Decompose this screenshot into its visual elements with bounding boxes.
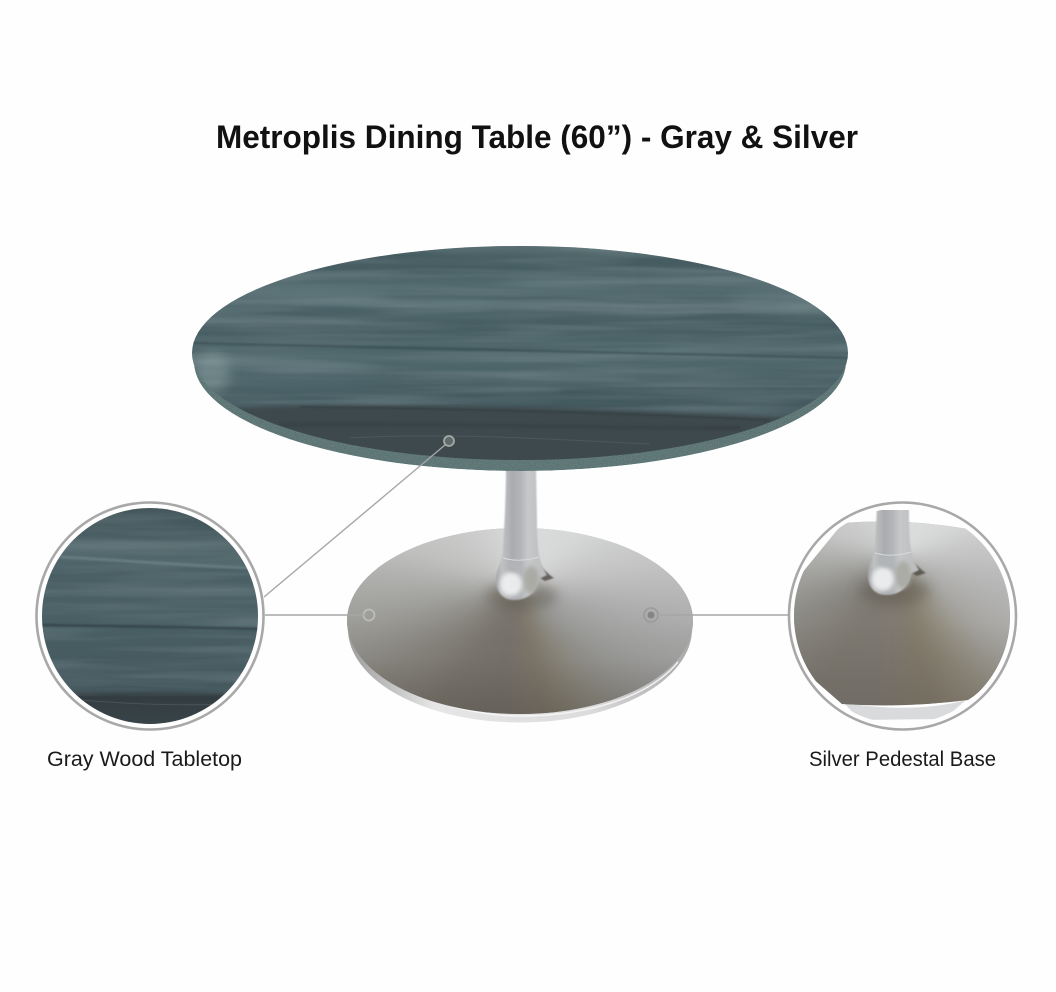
line: base to left circle bbox=[265, 614, 364, 616]
pedestal stem bbox=[486, 468, 558, 610]
label: gray wood tabletop: Gray Wood Tabletop bbox=[47, 748, 242, 771]
line: tabletop to left circle bbox=[264, 445, 445, 597]
callout dot: left base bbox=[364, 610, 374, 620]
base surface bbox=[347, 528, 693, 714]
base rim zoom bbox=[843, 700, 966, 720]
detail circle: gray wood tabletop bbox=[36, 502, 264, 730]
detail circle: silver pedestal base bbox=[788, 501, 1018, 731]
line: base to right circle bbox=[658, 614, 788, 616]
label: silver pedestal base: Silver Pedestal Base bbox=[809, 748, 996, 771]
title: Metroplis Dining Table (60”) - Gray & Silver bbox=[216, 119, 858, 155]
stem zoom bbox=[858, 510, 932, 606]
tabletop surface bbox=[190, 244, 850, 470]
wood texture bbox=[40, 506, 260, 726]
base rim bbox=[348, 536, 692, 722]
callout dot: right base bbox=[644, 608, 658, 622]
tabletop bbox=[190, 244, 850, 475]
ring bbox=[789, 502, 1016, 730]
base surface zoom bbox=[790, 515, 1014, 710]
wood grain bbox=[192, 248, 816, 416]
pedestal base bbox=[347, 468, 693, 722]
tabletop edge bbox=[194, 365, 846, 471]
callout lines bbox=[264, 445, 788, 615]
metal zoom bbox=[794, 510, 1010, 720]
callout dot: tabletop bbox=[444, 436, 454, 446]
ring bbox=[36, 502, 264, 730]
dark wood band bbox=[236, 404, 784, 460]
